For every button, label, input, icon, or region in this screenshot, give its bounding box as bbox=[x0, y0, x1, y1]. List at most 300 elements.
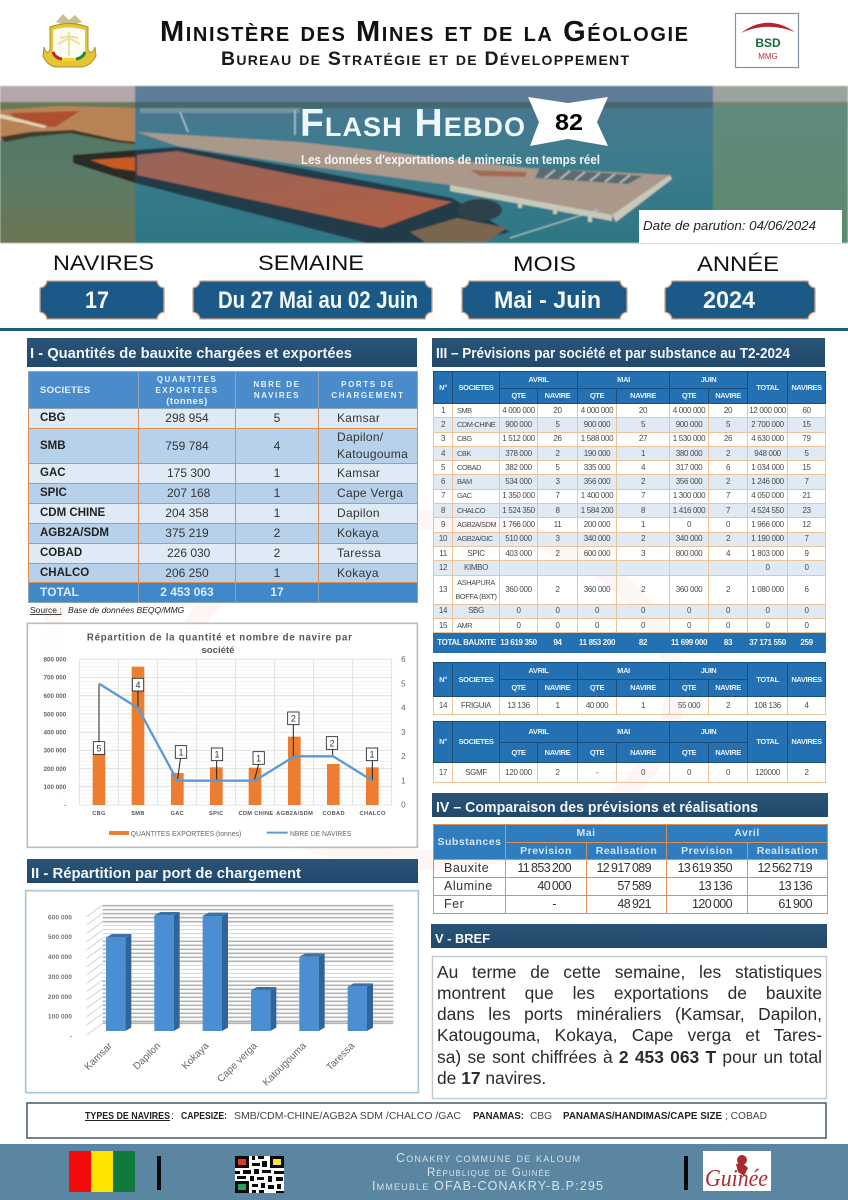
table: forecasts SGMF: NAVIRES bbox=[791, 737, 822, 746]
y axis: 300 000 bbox=[48, 974, 72, 981]
combo chart: quantity and ships by company: 2 bbox=[291, 714, 296, 724]
brief text: sa) se sont chiffrées à 2 453 063 T pour un total bbox=[437, 1047, 822, 1067]
table: bauxite by company: Katougouma bbox=[337, 447, 408, 461]
table: forecasts bauxite: 1 530 000 bbox=[673, 434, 705, 443]
table: forecasts bauxite: 26 bbox=[553, 434, 562, 443]
heading: section V bbox=[431, 924, 827, 948]
table: forecasts bauxite: 60 bbox=[802, 406, 811, 415]
table: forecasts bauxite: COBAD bbox=[457, 463, 481, 472]
brief text frame bbox=[432, 956, 826, 1098]
heading: section I bbox=[27, 338, 417, 367]
brief text: dans les ports minéraliers (Kamsar, Dapilon, bbox=[437, 1004, 822, 1024]
y axis bbox=[48, 915, 72, 1040]
BSD logo bbox=[736, 14, 798, 68]
table: forecast vs actual: Prevision bbox=[520, 844, 572, 856]
table: forecasts bauxite: 4 630 000 bbox=[751, 434, 784, 443]
table: forecasts SGMF bbox=[433, 721, 826, 783]
brief text bbox=[437, 962, 822, 1088]
table: forecasts bauxite: 7 bbox=[804, 477, 809, 486]
y axis: 200 000 bbox=[48, 994, 72, 1001]
table: bauxite by company: QUANTITES bbox=[157, 374, 217, 384]
table: forecasts bauxite: 2 bbox=[641, 585, 645, 594]
table: forecasts bauxite: 0 bbox=[726, 606, 730, 615]
table: forecasts bauxite: 0 bbox=[765, 620, 770, 630]
table: forecasts bauxite: 0 bbox=[516, 606, 521, 615]
table: forecast vs actual: 13 136 bbox=[698, 879, 732, 893]
table: forecast vs actual: 12 917 089 bbox=[596, 861, 651, 875]
table: forecasts bauxite: 0 bbox=[555, 606, 560, 615]
table: forecasts bauxite: 5 bbox=[441, 463, 445, 472]
table: forecasts bauxite: JUIN bbox=[701, 375, 716, 384]
table: forecasts bauxite: 1 300 000 bbox=[673, 491, 705, 500]
label: semaine: SEMAINE bbox=[258, 252, 364, 275]
table: forecasts bauxite: 0 bbox=[595, 620, 599, 630]
combo chart: quantity and ships by company: 1 bbox=[369, 750, 374, 760]
table: bauxite by company: AGB2A/SDM bbox=[40, 527, 109, 539]
table: bauxite by company: CHALCO bbox=[40, 566, 89, 578]
ship types box: TYPES DE NAVIRES bbox=[85, 1111, 170, 1122]
left axis: 700 000 bbox=[43, 675, 67, 682]
heading: section II: II - Répartition par port de chargement bbox=[31, 865, 301, 882]
x axis: Kamsar bbox=[83, 1040, 115, 1073]
table: bauxite by company: 759 784 bbox=[165, 438, 209, 452]
table: forecasts bauxite: 510 000 bbox=[505, 534, 532, 543]
pill: semaine value: Du 27 Mai au 02 Juin bbox=[218, 287, 418, 314]
table: forecasts SGMF: 17 bbox=[439, 768, 447, 776]
right axis: 0 bbox=[401, 801, 406, 810]
table: forecasts bauxite: SBG bbox=[468, 606, 484, 615]
left axis: 500 000 bbox=[43, 711, 67, 718]
table: forecasts Friguia: NAVIRES bbox=[791, 674, 822, 684]
table: forecasts bauxite: SMB bbox=[457, 406, 472, 415]
combo chart: quantity and ships by company: 2 bbox=[329, 738, 334, 748]
table: forecasts bauxite: 4 bbox=[726, 549, 730, 558]
brief text: Au terme de cette semaine, les statistiques bbox=[437, 962, 822, 982]
table: forecasts Friguia: FRIGUIA bbox=[461, 700, 491, 710]
table: forecasts Friguia: MAI bbox=[617, 666, 630, 675]
table: forecasts bauxite: 7 bbox=[641, 491, 645, 500]
table: forecasts bauxite: 27 bbox=[639, 434, 647, 443]
table: forecasts bauxite: NAVIRE bbox=[715, 391, 741, 400]
source note: Source : Base de données BEQQ/MMG bbox=[30, 605, 185, 615]
table: forecasts SGMF: QTE bbox=[511, 748, 526, 756]
table: forecasts Friguia: 1 bbox=[555, 700, 560, 710]
table: forecasts bauxite: 8 bbox=[441, 506, 445, 515]
table: forecasts bauxite: 6 bbox=[726, 463, 730, 472]
table: bauxite by company: 175 300 bbox=[167, 466, 210, 480]
table: forecast vs actual: 40 000 bbox=[537, 879, 571, 893]
table: forecasts Friguia: 14 bbox=[439, 700, 447, 710]
table: forecasts bauxite: 12 bbox=[439, 563, 447, 572]
table: forecasts bauxite: 3 bbox=[441, 434, 445, 443]
table: forecasts bauxite: 4 524 550 bbox=[751, 506, 784, 515]
table: forecasts bauxite: 1 512 000 bbox=[502, 434, 535, 443]
table: bauxite by company: 2 bbox=[274, 546, 280, 560]
table: forecasts SGMF: - bbox=[596, 768, 598, 776]
ship types box: PANAMAS: bbox=[473, 1111, 524, 1122]
table: bauxite by company: NBRE DE bbox=[253, 380, 301, 389]
table: forecasts bauxite: 378 000 bbox=[505, 449, 532, 458]
table: forecasts bauxite: 2 bbox=[726, 477, 730, 486]
table: forecasts bauxite: 3 bbox=[555, 477, 560, 486]
category axis bbox=[92, 811, 386, 817]
chart title second line: société bbox=[201, 645, 235, 656]
table: forecasts bauxite: 800 000 bbox=[676, 549, 702, 558]
table: forecasts Friguia bbox=[433, 662, 826, 715]
table: forecast vs actual: - bbox=[552, 897, 556, 911]
table: forecast vs actual: Realisation bbox=[596, 844, 657, 856]
table: forecasts Friguia: 2 bbox=[726, 700, 730, 710]
table: forecasts bauxite: 0 bbox=[687, 520, 691, 529]
table: forecasts bauxite: KIMBO bbox=[464, 563, 488, 572]
table: forecasts Friguia: NAVIRE bbox=[545, 683, 570, 692]
table: forecasts bauxite: CHALCO bbox=[457, 506, 485, 515]
table: forecasts bauxite: AMR bbox=[457, 620, 472, 630]
BSD logo: MMG bbox=[758, 52, 778, 61]
table: bauxite by company: EXPORTEES bbox=[155, 386, 219, 394]
table: forecasts bauxite: 13 619 350 bbox=[500, 638, 537, 647]
table: forecasts SGMF: QTE bbox=[682, 748, 696, 756]
table: bauxite by company: Cape Verga bbox=[337, 486, 403, 500]
table: forecasts bauxite: 21 bbox=[802, 491, 811, 500]
background watermark bbox=[52, 520, 675, 860]
table: forecasts SGMF: 0 bbox=[726, 768, 730, 776]
Guinée logo bbox=[703, 1151, 771, 1192]
subtitle: Bureau de Stratégie et de Développement bbox=[221, 48, 629, 70]
table: forecasts bauxite: 2 bbox=[555, 585, 560, 594]
table: forecasts SGMF: TOTAL bbox=[756, 737, 779, 746]
table: forecasts bauxite: 1 350 000 bbox=[502, 491, 535, 500]
table: forecasts bauxite: 0 bbox=[641, 606, 645, 615]
table: forecasts bauxite: 2 bbox=[726, 585, 730, 594]
table: forecasts bauxite: 4 000 000 bbox=[502, 406, 535, 415]
table: forecasts bauxite: 900 000 bbox=[584, 420, 610, 429]
title: Ministère des Mines et de la Géologie bbox=[160, 16, 688, 48]
table: forecasts bauxite: 900 000 bbox=[505, 420, 532, 429]
table: forecasts bauxite: 0 bbox=[765, 563, 770, 572]
table: forecasts SGMF: AVRIL bbox=[528, 727, 549, 736]
table: bauxite by company: 1 bbox=[274, 466, 280, 480]
table: forecasts bauxite: 2 bbox=[726, 534, 730, 543]
table: forecasts bauxite: 83 bbox=[724, 638, 732, 647]
table: bauxite by company: 1 bbox=[274, 506, 280, 520]
table: forecast vs actual: 11 853 200 bbox=[517, 861, 571, 875]
table: bauxite by company: 206 250 bbox=[165, 566, 209, 580]
table: forecasts Friguia: NAVIRE bbox=[630, 683, 656, 692]
ship types box: ; COBAD bbox=[725, 1111, 767, 1122]
table: forecasts SGMF: 120000 bbox=[755, 768, 780, 776]
footer address: République de Guinée bbox=[427, 1167, 550, 1179]
table: forecasts bauxite: 1 080 000 bbox=[751, 585, 784, 594]
table: forecasts SGMF: 0 bbox=[641, 768, 645, 776]
table: bauxite by company: TOTAL bbox=[40, 585, 79, 599]
table: forecasts bauxite: 0 bbox=[804, 620, 809, 630]
table: bauxite by company bbox=[28, 371, 418, 603]
left axis: 600 000 bbox=[43, 693, 67, 700]
QR code bbox=[235, 1156, 284, 1193]
table: forecasts bauxite: 6 bbox=[441, 477, 445, 486]
right axis: 3 bbox=[401, 728, 406, 737]
category axis: CHALCO bbox=[360, 811, 386, 817]
table: forecasts Friguia: QTE bbox=[590, 683, 604, 692]
table: forecasts bauxite: 7 bbox=[726, 506, 730, 515]
table: forecasts bauxite: 0 bbox=[516, 620, 521, 630]
right axis: 2 bbox=[401, 752, 406, 761]
table: forecasts bauxite: 0 bbox=[687, 606, 691, 615]
table: forecasts Friguia: TOTAL bbox=[756, 674, 779, 684]
table: forecasts bauxite: 2 700 000 bbox=[751, 420, 784, 429]
table: bauxite by company: COBAD bbox=[40, 547, 82, 559]
table: forecasts bauxite: 2 bbox=[726, 449, 730, 458]
table: forecasts bauxite: 4 050 000 bbox=[751, 491, 784, 500]
table: forecasts bauxite: 12 000 000 bbox=[749, 406, 786, 415]
table: forecasts bauxite: 317 000 bbox=[676, 463, 702, 472]
table: bauxite by company: Kamsar bbox=[337, 466, 380, 480]
table: forecasts bauxite: 14 bbox=[439, 606, 447, 615]
table: forecasts bauxite: 4 bbox=[441, 449, 445, 458]
table: forecasts bauxite: 5 bbox=[555, 420, 560, 429]
table: forecasts SGMF: NAVIRE bbox=[715, 748, 741, 756]
table: forecasts bauxite: QTE bbox=[511, 391, 526, 400]
pill: semaine value bbox=[193, 281, 432, 319]
table: forecasts bauxite: 2 bbox=[641, 534, 645, 543]
table: forecasts bauxite: TOTAL bbox=[756, 382, 779, 392]
leader lines bbox=[99, 684, 372, 781]
ship types box: SMB/CDM-CHINE/AGB2A SDM /CHALCO /GAC bbox=[234, 1111, 461, 1122]
table: forecasts bauxite: SPIC bbox=[467, 549, 485, 558]
right axis: 4 bbox=[401, 704, 406, 713]
3D bar chart: ports bbox=[26, 891, 418, 1093]
issue number star: 82 bbox=[555, 109, 583, 135]
table: bauxite by company: 5 bbox=[274, 411, 280, 425]
table: forecasts bauxite: 0 bbox=[726, 520, 730, 529]
ship types box: CBG bbox=[530, 1111, 552, 1122]
table: forecasts bauxite: 11 bbox=[439, 549, 447, 558]
combo chart: quantity and ships by company: 5 bbox=[96, 743, 101, 753]
table: forecast vs actual: Fer bbox=[444, 897, 464, 911]
x axis: Kokaya bbox=[180, 1040, 212, 1072]
table: forecasts bauxite: 15 bbox=[802, 420, 811, 429]
table: forecasts bauxite: 7 bbox=[804, 534, 809, 543]
table: forecasts bauxite: 8 bbox=[555, 506, 560, 515]
table: forecasts bauxite: 37 171 550 bbox=[749, 638, 786, 647]
table: bauxite by company: 207 168 bbox=[167, 486, 210, 500]
right axis: 6 bbox=[401, 655, 406, 664]
table: forecasts Friguia: SOCIETES bbox=[458, 674, 494, 684]
table: forecasts SGMF: N° bbox=[439, 737, 447, 746]
table: forecast vs actual: 12 562 719 bbox=[757, 861, 812, 875]
category axis: SMB bbox=[131, 811, 145, 817]
table: bauxite by company: 1 bbox=[274, 566, 280, 580]
chart title: Répartition de la quantité et nombre de navire par bbox=[87, 633, 352, 644]
table: forecast vs actual: 48 921 bbox=[617, 897, 651, 911]
left axis: 100 000 bbox=[43, 784, 67, 791]
category axis: CDM CHINE bbox=[238, 811, 274, 817]
table: bauxite by company: 2 bbox=[274, 526, 280, 540]
table: forecasts bauxite: 1 803 000 bbox=[751, 549, 784, 558]
heading: section V: V - BREF bbox=[435, 931, 490, 946]
footer address bbox=[372, 1151, 603, 1193]
left axis: - bbox=[64, 802, 66, 809]
table: bauxite by company: SMB bbox=[40, 440, 66, 452]
table: bauxite by company: NAVIRES bbox=[254, 391, 300, 400]
combo chart: quantity and ships by company bbox=[27, 623, 417, 847]
table: forecasts bauxite: 3 bbox=[555, 534, 560, 543]
table: forecasts bauxite: 20 bbox=[724, 406, 732, 415]
table: forecast vs actual: Prevision bbox=[681, 844, 733, 856]
table: bauxite by company: GAC bbox=[40, 467, 66, 479]
table: forecasts bauxite: SOCIETES bbox=[458, 382, 494, 392]
pill: année value bbox=[665, 281, 815, 319]
banner tagline: Les données d'exportations de minerais en temps réel bbox=[301, 152, 600, 167]
x axis bbox=[83, 1040, 357, 1088]
table: forecast vs actual: 57 589 bbox=[617, 879, 651, 893]
table: forecasts bauxite: 1 766 000 bbox=[502, 520, 535, 529]
table: forecasts bauxite: 2 bbox=[555, 449, 560, 458]
table: forecasts SGMF: SGMF bbox=[465, 768, 487, 776]
table: forecasts Friguia: 1 bbox=[641, 700, 645, 710]
table: forecasts bauxite: 1 416 000 bbox=[673, 506, 705, 515]
flag of Guinea bbox=[69, 1151, 135, 1192]
table: forecasts bauxite: 356 000 bbox=[584, 477, 610, 486]
table: forecasts bauxite: 2 bbox=[555, 549, 560, 558]
table: forecast vs actual: Realisation bbox=[757, 844, 818, 856]
table: forecasts bauxite: 4 000 000 bbox=[581, 406, 613, 415]
table: forecast vs actual: Substances bbox=[438, 836, 501, 848]
table: forecasts bauxite: AVRIL bbox=[528, 375, 549, 384]
table: forecast vs actual: 120 000 bbox=[692, 897, 732, 911]
table: forecasts bauxite: QTE bbox=[590, 391, 604, 400]
table: forecasts bauxite: 9 bbox=[441, 520, 445, 529]
table: forecasts bauxite: 4 bbox=[641, 463, 645, 472]
table: forecasts SGMF: 2 bbox=[804, 768, 809, 776]
table: forecasts bauxite: 340 000 bbox=[584, 534, 610, 543]
table: forecasts bauxite: GAC bbox=[457, 491, 472, 500]
table: forecasts bauxite: 1 bbox=[641, 520, 645, 529]
table: forecasts bauxite: CBG bbox=[457, 434, 472, 443]
footer address: Immeuble OFAB-CONAKRY-B.P:295 bbox=[372, 1179, 603, 1193]
table: forecasts bauxite: N° bbox=[439, 382, 447, 392]
table: forecasts bauxite: 82 bbox=[639, 638, 647, 647]
publication date bbox=[639, 210, 842, 243]
table: forecasts bauxite: 1 584 200 bbox=[581, 506, 613, 515]
heading: section IV: IV – Comparaison des prévisions et réalisations bbox=[436, 799, 758, 816]
table: forecasts bauxite: BAM bbox=[457, 477, 472, 486]
table: forecasts bauxite: 15 bbox=[802, 463, 811, 472]
table: forecast vs actual bbox=[433, 824, 828, 914]
table: forecasts bauxite: 0 bbox=[641, 620, 645, 630]
left axis: 200 000 bbox=[43, 766, 67, 773]
table: bauxite by company: 2 453 063 bbox=[160, 585, 214, 599]
combo chart: quantity and ships by company: 1 bbox=[214, 750, 219, 760]
ship types box: PANAMAS/HANDIMAS/CAPE SIZE bbox=[563, 1111, 722, 1122]
table: forecasts bauxite: TOTAL BAUXITE bbox=[437, 638, 496, 647]
table: forecasts Friguia: NAVIRE bbox=[715, 683, 741, 692]
table: forecasts bauxite bbox=[433, 371, 826, 653]
line: ships bbox=[99, 684, 372, 781]
x axis: Taressa bbox=[325, 1040, 357, 1073]
table: forecasts bauxite: 335 000 bbox=[584, 463, 610, 472]
table: forecasts bauxite: 13 bbox=[439, 585, 447, 594]
heading: section III bbox=[432, 338, 825, 367]
table: bauxite by company: CDM CHINE bbox=[40, 507, 105, 519]
table: forecasts bauxite: 360 000 bbox=[584, 585, 610, 594]
table: forecasts bauxite: 1 bbox=[641, 449, 645, 458]
ship types box: : bbox=[171, 1111, 174, 1122]
table: forecasts bauxite: 20 bbox=[553, 406, 562, 415]
table: forecasts bauxite: 94 bbox=[553, 638, 562, 647]
table: bauxite by company: (tonnes) bbox=[166, 396, 208, 406]
legend: QUANTITES EXPORTEES (tonnes) bbox=[131, 829, 241, 838]
table: forecasts bauxite: 11 853 200 bbox=[579, 638, 615, 647]
table: forecasts bauxite: 0 bbox=[765, 606, 770, 615]
table: forecasts SGMF: 2 bbox=[555, 768, 560, 776]
table: bauxite by company: 226 030 bbox=[167, 546, 210, 560]
legend bbox=[109, 829, 351, 838]
table: forecasts SGMF: NAVIRE bbox=[630, 748, 656, 756]
issue number star bbox=[528, 97, 608, 146]
table: forecasts bauxite: 1 190 000 bbox=[751, 534, 784, 543]
table: forecasts bauxite: 11 bbox=[554, 520, 561, 529]
pill: navires value: 17 bbox=[85, 287, 109, 314]
Guinée logo: Guinée bbox=[705, 1166, 768, 1192]
table: forecasts bauxite: 0 bbox=[804, 563, 809, 572]
category axis: COBAD bbox=[322, 811, 345, 817]
table: forecasts bauxite: 259 bbox=[800, 638, 813, 647]
table: forecasts bauxite: 5 bbox=[641, 420, 645, 429]
table: bauxite by company: Dapilon/ bbox=[337, 430, 383, 444]
ship types box: CAPESIZE: bbox=[181, 1111, 227, 1122]
y axis: - bbox=[70, 1033, 72, 1040]
x axis: Cape verga bbox=[216, 1040, 260, 1085]
pill: navires value bbox=[40, 281, 164, 319]
table: forecasts bauxite: 10 bbox=[439, 534, 447, 543]
table: bauxite by company: Kamsar bbox=[337, 411, 380, 425]
table: forecasts bauxite: 1 400 000 bbox=[581, 491, 613, 500]
combo chart: quantity and ships by company: 1 bbox=[256, 753, 261, 763]
y axis: 100 000 bbox=[48, 1014, 72, 1021]
pill: mois value: Mai - Juin bbox=[494, 287, 601, 314]
table: forecasts SGMF: 120 000 bbox=[505, 768, 532, 776]
table: forecast vs actual: 13 136 bbox=[778, 879, 812, 893]
table: forecasts SGMF: MAI bbox=[617, 727, 630, 736]
table: forecasts bauxite: 380 000 bbox=[676, 449, 702, 458]
pill: année value: 2024 bbox=[703, 287, 756, 314]
table: forecasts bauxite: 1 588 000 bbox=[581, 434, 613, 443]
heading: section III: III – Prévisions par société et par substance au T2-2024 bbox=[436, 345, 791, 362]
table: bauxite by company: 375 219 bbox=[165, 526, 209, 540]
table: forecasts bauxite: 2 bbox=[641, 477, 645, 486]
table: forecasts Friguia: QTE bbox=[511, 683, 526, 692]
table: bauxite by company: CBG bbox=[40, 412, 66, 424]
table: forecast vs actual: 61 900 bbox=[778, 897, 812, 911]
pill: mois value bbox=[462, 281, 627, 319]
table: forecasts bauxite: 4 000 000 bbox=[673, 406, 705, 415]
table: bauxite by company: PORTS DE bbox=[341, 380, 395, 389]
x axis: Katougouma bbox=[261, 1040, 309, 1088]
x axis: Dapilon bbox=[131, 1041, 163, 1072]
label: navires: NAVIRES bbox=[53, 252, 154, 275]
table: forecasts bauxite: 1 524 350 bbox=[502, 506, 535, 515]
table: forecasts bauxite: 7 bbox=[555, 491, 560, 500]
table: forecasts bauxite: 600 000 bbox=[584, 549, 610, 558]
publication date: Date de parution: 04/06/2024 bbox=[643, 219, 816, 233]
table: forecasts bauxite: CDM-CHINE bbox=[457, 420, 495, 429]
heading: section I: I - Quantités de bauxite chargées et exportées bbox=[30, 345, 352, 362]
table: forecasts Friguia: 13 136 bbox=[507, 700, 530, 710]
left axis: 800 000 bbox=[43, 656, 67, 663]
left axis: 300 000 bbox=[43, 748, 67, 755]
